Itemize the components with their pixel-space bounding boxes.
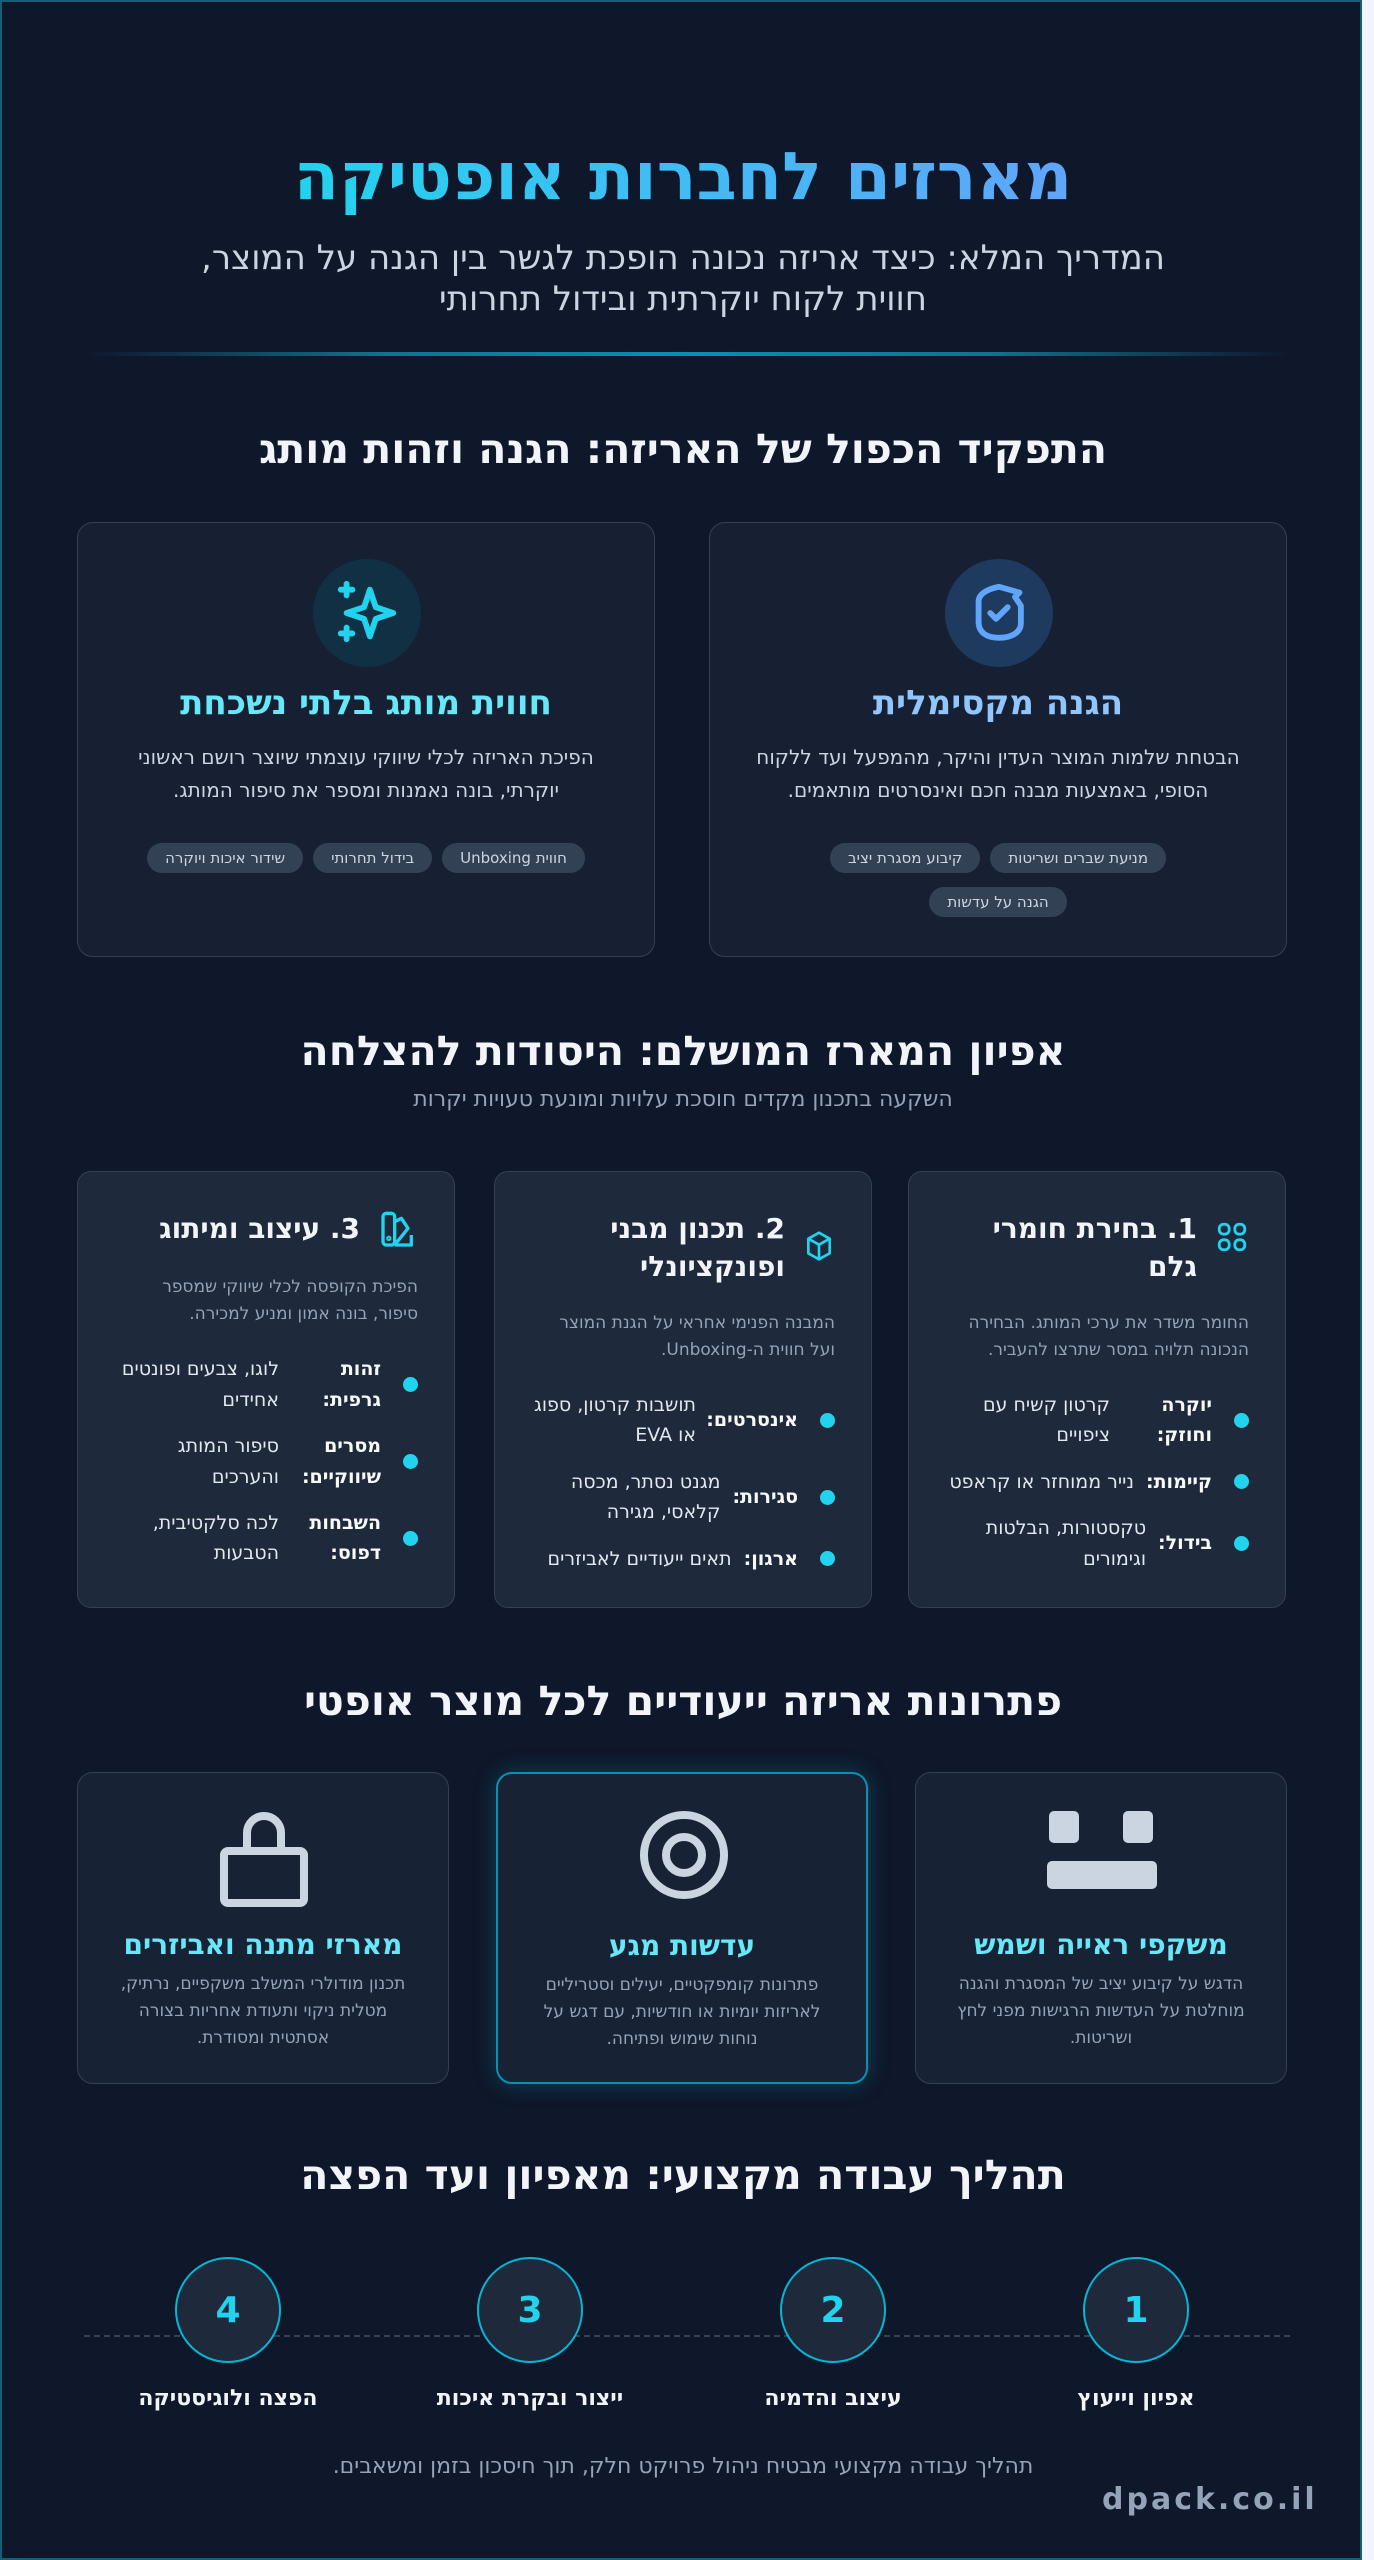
label 4: הפצה ולוגיסטיקה — [138, 2386, 318, 2411]
bullets: לכה סלקטיבית, הטבעות — [153, 1512, 279, 1564]
panel: structure — [494, 1171, 872, 1608]
icon: sparkle — [313, 559, 421, 667]
text: תכנון מודולרי המשלב משקפיים, נרתיק, מטלית ניקוי ותעודת אחריות בצורה אסתטית ומסודרת. — [121, 1974, 405, 2048]
subtitle: המדריך המלא: כיצד אריזה נכונה הופכת לגשר בין הגנה על המוצר, — [201, 238, 1165, 278]
bullets: יוקרה וחוזק: — [1157, 1394, 1212, 1446]
title: מארזי מתנה ואביזרים — [124, 1928, 402, 1961]
icon: shield — [945, 559, 1053, 667]
label 2: עיצוב והדמיה — [764, 2386, 902, 2411]
bullets: קיימות: — [1146, 1471, 1212, 1493]
title: 3. עיצוב ומיתוג — [159, 1212, 360, 1245]
tags: בידול תחרותי — [331, 849, 414, 867]
label 3: ייצור ובקרת איכות — [437, 2386, 623, 2411]
bullets: זהות גרפית: — [322, 1358, 381, 1411]
subheading: השקעה בתכנון מקדים חוסכת עלויות ומונעת טעויות יקרות — [413, 1087, 953, 1112]
panel: materials — [908, 1171, 1286, 1608]
tags: שידור איכות ויוקרה — [165, 849, 285, 867]
text: המבנה הפנימי אחראי על הגנת המוצר ועל חווית ה-Unboxing. — [559, 1313, 835, 1360]
bullets: אינסרטים: — [706, 1409, 798, 1431]
bullets: ארגון: — [744, 1548, 798, 1570]
panel: brand experience — [77, 522, 655, 957]
bullets: לוגו, צבעים ופונטים אחידים — [122, 1358, 279, 1411]
bullets: טקסטורות, הבלטות וגימורים — [986, 1517, 1146, 1570]
step 3: 3 — [517, 2290, 543, 2330]
icon: glasses — [1047, 1811, 1157, 1889]
subtitle — [201, 238, 1165, 319]
text: הבטחת שלמות המוצר העדין והיקר, מהמפעל ועד ללקוח הסופי, באמצעות מבנה חכם ואינסרטים מותאמים. — [756, 745, 1240, 802]
bullets: תושבות קרטון, ספוג או EVA — [534, 1394, 696, 1446]
heading: planning: אפיון המארז המושלם: היסודות להצלחה — [301, 1027, 1065, 1075]
heading: הגנה מקסימלית — [873, 683, 1123, 723]
tags — [830, 843, 1166, 917]
step 4 — [175, 2257, 281, 2363]
heading: process: תהליך עבודה מקצועי: מאפיון ועד הפצה — [300, 2151, 1066, 2199]
step 1: 1 — [1123, 2290, 1149, 2330]
heading: חווית מותג בלתי נשכחת — [180, 683, 552, 723]
footer text: תהליך עבודה מקצועי מבטיח ניהול פרויקט חלק, תוך חיסכון בזמן ומשאבים. — [333, 2454, 1033, 2479]
tags: חווית Unboxing — [460, 849, 567, 867]
panel: design — [77, 1171, 455, 1608]
step 2 — [780, 2257, 886, 2363]
bullets: השבחות דפוס: — [309, 1512, 381, 1564]
text: הדגש על קיבוע יציב של המסגרת והגנה מוחלטת על העדשות הרגישות מפני לחץ ושריטות. — [957, 1974, 1245, 2048]
panel: maximum protection — [709, 522, 1287, 957]
title: מארזים לחברות אופטיקה — [294, 138, 1072, 215]
bullets: תאים ייעודיים לאביזרים — [548, 1548, 732, 1570]
step 1 — [1083, 2257, 1189, 2363]
text: החומר משדר את ערכי המותג. הבחירה הנכונה תלויה במסר שתרצו להעביר. — [969, 1313, 1249, 1360]
step 3 — [477, 2257, 583, 2363]
subtitle: חווית לקוח יוקרתית ובידול תחרותי — [439, 279, 927, 319]
title: 2. תכנון מבני ופונקציונלי — [610, 1212, 785, 1283]
brand: dpack.co.il — [1102, 2482, 1318, 2517]
step 2: 2 — [820, 2290, 846, 2330]
bullets: מגנט נסתר, מכסה קלאסי, מגירה — [571, 1471, 720, 1523]
icon: lock — [220, 1812, 308, 1907]
tags — [147, 843, 585, 873]
title: 1. בחירת חומרי גלם — [993, 1212, 1197, 1283]
bullets — [122, 1358, 418, 1564]
bullets: סגירות: — [732, 1486, 798, 1508]
bullets: קרטון קשיח עם ציפויים — [983, 1394, 1110, 1446]
panel: glasses — [915, 1772, 1287, 2084]
bullets: בידול: — [1158, 1532, 1212, 1554]
heading: solutions: פתרונות אריזה ייעודיים לכל מוצר אופטי — [304, 1677, 1062, 1725]
tags: מניעת שברים ושריטות — [1008, 849, 1148, 867]
bullets — [949, 1394, 1249, 1570]
panel: gift boxes — [77, 1772, 449, 2084]
title: עדשות מגע — [609, 1929, 755, 1962]
icon: lens — [640, 1811, 728, 1899]
panel: contact lenses — [496, 1772, 868, 2084]
heading: dual role: התפקיד הכפול של האריזה: הגנה וזהות מותג — [259, 425, 1107, 473]
bullets — [534, 1394, 835, 1570]
text: הפיכת האריזה לכלי שיווקי עוצמתי שיוצר רושם ראשוני יוקרתי, בונה נאמנות ומספר את סיפור המותג. — [138, 745, 594, 802]
title: משקפי ראייה ושמש — [974, 1928, 1228, 1961]
text: פתרונות קומפקטיים, יעילים וסטריליים לאריזות יומיות או חודשיות, עם דגש על נוחות שימוש ופתיחה. — [544, 1975, 820, 2049]
tags: קיבוע מסגרת יציב — [848, 849, 962, 867]
step 4: 4 — [215, 2290, 241, 2330]
bullets: מסרים שיווקיים: — [302, 1435, 381, 1488]
bullets: נייר ממוחזר או קראפט — [949, 1471, 1134, 1493]
bullets: סיפור המותג והערכים — [178, 1435, 279, 1488]
text: הפיכת הקופסה לכלי שיווקי שמספר סיפור, בונה אמון ומניע למכירה. — [162, 1277, 418, 1324]
tags: הגנה על עדשות — [947, 893, 1049, 911]
label 1: אפיון וייעוץ — [1078, 2386, 1194, 2411]
